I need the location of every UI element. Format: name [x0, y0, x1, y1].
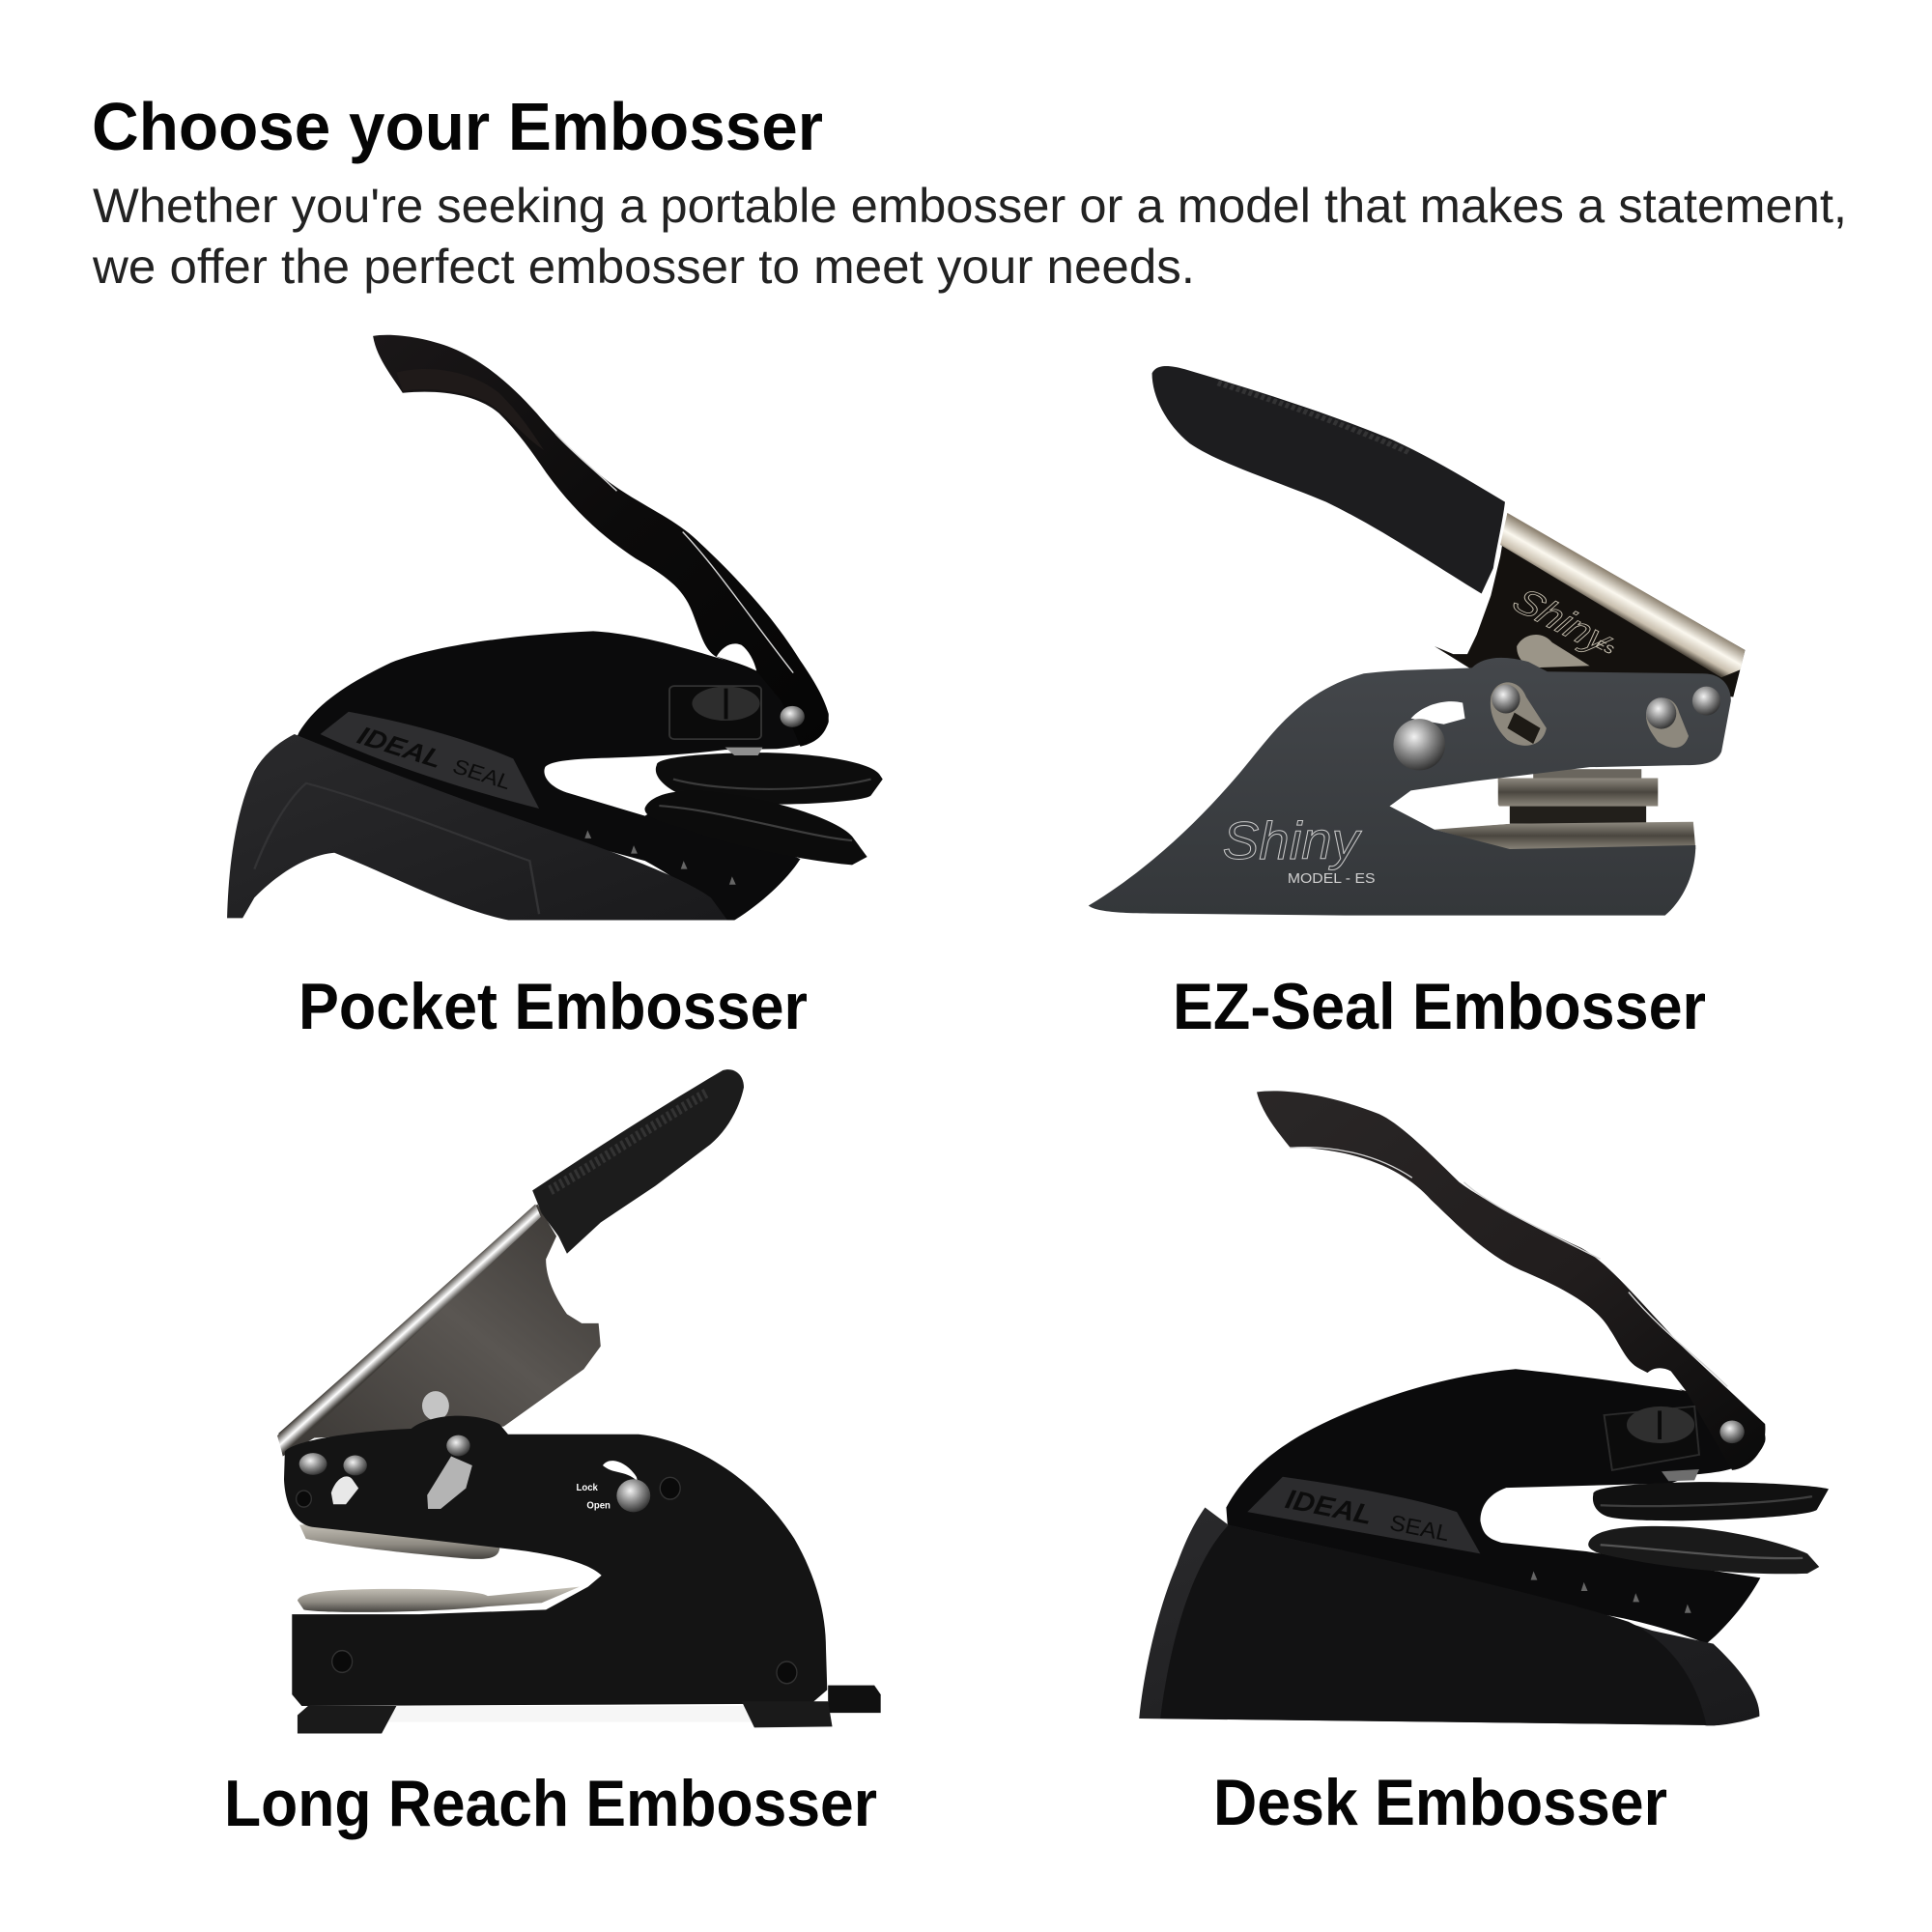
- jaw opening: [1390, 782, 1510, 829]
- body logo: Shiny: [1223, 810, 1362, 870]
- body upper: [295, 631, 829, 921]
- metal lever: [1435, 514, 1745, 696]
- intro text: Whether you're seeking a portable embosser or a model that makes a statement,: [93, 179, 1847, 233]
- handle hole: [717, 643, 756, 670]
- handle: [1257, 1091, 1765, 1470]
- base panel: [1160, 1525, 1706, 1725]
- pivot rivet: [781, 706, 805, 727]
- rivets: [1394, 685, 1720, 770]
- label: long reach embosser: Long Reach Embosser: [224, 1767, 877, 1840]
- bottom disc: [644, 791, 867, 865]
- model text: MODEL - ES: [1288, 870, 1376, 887]
- grip: [1152, 366, 1505, 593]
- lower die: [1435, 822, 1695, 850]
- nameplate text: [1283, 1485, 1452, 1546]
- body: [1089, 658, 1731, 916]
- lock labels: Open: [586, 1500, 611, 1512]
- label: ez-seal embosser: EZ-Seal Embosser: [1173, 970, 1706, 1043]
- lock labels: Lock: [577, 1483, 598, 1493]
- lever logo: Shiny: [1505, 581, 1622, 662]
- nameplate text: SEAL: [449, 754, 515, 794]
- lock dial: [669, 686, 761, 739]
- handle: [373, 335, 829, 747]
- handle highlight: [1290, 1148, 1727, 1386]
- lever model text: ES: [1593, 638, 1617, 657]
- grip: [532, 1069, 744, 1254]
- handle grip panel: [396, 369, 544, 450]
- slots: [331, 1456, 638, 1509]
- title: Choose your Embosser: [92, 89, 823, 164]
- lock labels: [577, 1483, 611, 1512]
- intro text: we offer the perfect embosser to meet your needs.: [92, 240, 1195, 294]
- grey lower seam: [254, 783, 539, 914]
- alignment marks: [1531, 1572, 1691, 1613]
- bottom disc: [1588, 1526, 1819, 1574]
- nameplate: [1247, 1477, 1480, 1553]
- nameplate text: IDEAL: [1283, 1485, 1375, 1531]
- upper die: [299, 1522, 499, 1559]
- lower die: [298, 1587, 580, 1612]
- label: pocket embosser: Pocket Embosser: [298, 970, 808, 1043]
- product: ez-seal embosser: [1089, 366, 1745, 916]
- lever slot: [1517, 635, 1590, 668]
- upper die: [1498, 769, 1658, 824]
- nameplate text: SEAL: [1387, 1510, 1452, 1546]
- grip texture: [1218, 383, 1411, 453]
- grip texture: [550, 1092, 708, 1190]
- top disc: [656, 748, 883, 805]
- base: [1139, 1508, 1759, 1725]
- body upper: [1226, 1369, 1766, 1644]
- blade: [278, 1205, 601, 1456]
- chrome strip: [277, 1205, 541, 1456]
- product: long reach embosser: [277, 1069, 881, 1733]
- blade slot: [422, 1391, 449, 1420]
- screws: [297, 1477, 797, 1684]
- chrome strip: [1500, 513, 1745, 677]
- handle hole: [1643, 1368, 1686, 1391]
- nameplate text: [354, 721, 515, 794]
- rivets: [299, 1435, 650, 1512]
- product: pocket embosser: [227, 335, 883, 921]
- nameplate: [321, 712, 539, 809]
- top disc: [1593, 1469, 1829, 1520]
- grey lower body: [227, 734, 727, 921]
- nameplate text: IDEAL: [354, 721, 447, 774]
- body: [284, 1416, 827, 1706]
- handle highlight: [555, 434, 793, 673]
- product: desk embosser: [1139, 1091, 1829, 1725]
- lock dial: [1605, 1406, 1699, 1470]
- table shadow: [382, 1706, 753, 1722]
- label: desk embosser: Desk Embosser: [1213, 1766, 1667, 1839]
- pivot rivet: [1719, 1420, 1745, 1443]
- feet: [298, 1686, 881, 1733]
- alignment marks: [584, 830, 736, 885]
- intro text: [92, 179, 1847, 294]
- slots: [1411, 682, 1689, 748]
